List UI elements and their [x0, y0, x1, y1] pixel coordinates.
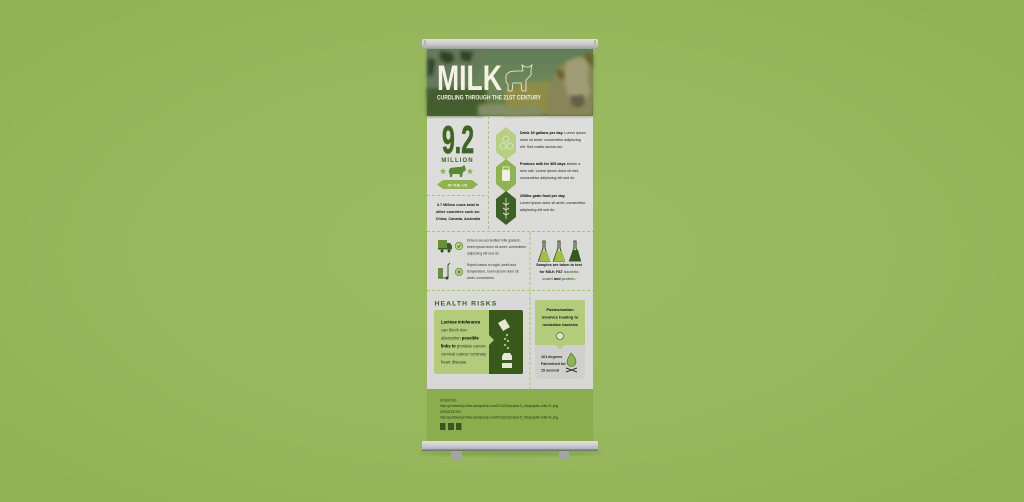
text: grain [520, 194, 586, 212]
icon: cheese pouring to milk [498, 319, 512, 368]
text: samples [536, 263, 583, 281]
text: samples: Samples are taken to test [536, 263, 583, 267]
icon: hand truck [438, 263, 450, 280]
text: lactose: Lactose intolerance [441, 320, 481, 324]
icon: hexagon rings [496, 127, 516, 160]
header photo [427, 49, 593, 116]
icon: check badge [455, 242, 463, 250]
text: degrees [541, 355, 566, 372]
sources text: http://pemberleyh.files.wordpress.com/2013/12/project-5_infographic-milk-01.png [440, 416, 558, 420]
social icons [440, 423, 462, 430]
text: drink: dolor sit amet, consectetur adipiscing [520, 138, 581, 142]
text: produce: Produce milk for 305 days before a [520, 162, 581, 166]
icon: hexagon wheat [496, 191, 516, 225]
text: lactose [441, 320, 487, 364]
text: drivers: Drivers are accredited milk graders, [467, 238, 521, 242]
text: degrees: 15 second [541, 368, 560, 372]
panel: lactose [434, 310, 523, 374]
icon: flame [566, 353, 577, 372]
text: grain: adipiscing elit sed do. [520, 208, 555, 212]
icon: flasks [538, 241, 581, 261]
text: drivers [467, 238, 527, 256]
text: other countries: China, Canada, Australia [436, 217, 481, 221]
text: samples: for MILK FAT bacteria [540, 270, 579, 274]
footer panel [427, 389, 593, 443]
text: lactose: heart disease. [441, 360, 467, 364]
text: grain: Lorem ipsum dolor sit amet, consectetur [520, 201, 586, 205]
text: drink: elit. Sed mattis lacinia dui. [520, 145, 563, 149]
text: produce [520, 162, 581, 180]
text: pasteurization: involves heating to [542, 314, 579, 320]
title: MILK: MILK [437, 59, 502, 98]
text: lactose: cervical cancer coronary [441, 352, 487, 356]
text: drink [520, 131, 586, 149]
icon: cow outline [506, 65, 532, 91]
ribbon: in the us [437, 180, 478, 189]
text: drivers: lorem ipsum dolor sit amet, consectetur [467, 245, 527, 249]
text: reject: amet, consectetur. [467, 276, 495, 280]
text: other countries: 3.7 Million cows total in [437, 203, 480, 207]
big number: 9.2 [442, 119, 474, 162]
heading: health risks: HEALTH RISKS [434, 300, 497, 308]
text: produce: consectetur adipiscing elit sed do. [520, 176, 575, 180]
text: lactose: can block iron [441, 328, 468, 332]
stat: 9.2 million: IN THE US [448, 182, 468, 187]
icon: bacteria [556, 332, 564, 340]
text: drivers: adipiscing elit sed do. [467, 252, 499, 256]
panel: pasteurization [535, 300, 585, 379]
text: pasteurization [542, 307, 579, 327]
text: grain: 200lbs grain food per day. [520, 194, 566, 198]
text: pasteurization: neutralize bacteria [542, 322, 578, 327]
dashed dividers [427, 116, 593, 389]
text: reject: temperature, lorem ipsum dolor sit [467, 270, 519, 274]
text: produce: new calf. Lorem ipsum dolor sit met, [520, 169, 579, 173]
floor shadow [418, 450, 602, 456]
top bar [422, 39, 598, 49]
MILLION label: MILLION [441, 158, 474, 164]
text: reject [467, 263, 519, 280]
icon: truck [438, 240, 452, 252]
sources text [440, 398, 558, 420]
icon: cow and stars [440, 165, 473, 177]
icon: hexagon milk can [496, 159, 516, 192]
text: pasteurization: Pasteurization [546, 307, 574, 312]
icon: cross badge [455, 268, 463, 276]
stat: 9.2 million [437, 119, 478, 189]
text: degrees: 161 degrees [541, 355, 562, 359]
text: reject: Reject based on sight, smell and [467, 263, 516, 267]
text: samples: count and protein. [542, 277, 576, 281]
text: other countries [436, 203, 481, 221]
banner stand feet [451, 451, 569, 459]
text: drink: Drink 29 gallons per day. Lorem ipsum [520, 131, 586, 135]
text: degrees: Fahrenheit for [541, 362, 566, 366]
banner panel [427, 48, 593, 443]
sources text: http://pemberleyh.files.wordpress.com/2013/12/project-5_infographic-milk-01.png [440, 404, 558, 408]
text: lactose: links to prostate cancer, [441, 344, 487, 348]
sources text: SOURCES: [440, 398, 457, 402]
text: other countries: other countries such as: [436, 210, 480, 214]
text: lactose: absorption possible [441, 336, 479, 340]
bottom bar [422, 441, 598, 451]
sources text: CREATED BY: [440, 410, 462, 414]
subtitle: CURDLING THROUGH THE 21ST CENTURY [437, 94, 542, 102]
